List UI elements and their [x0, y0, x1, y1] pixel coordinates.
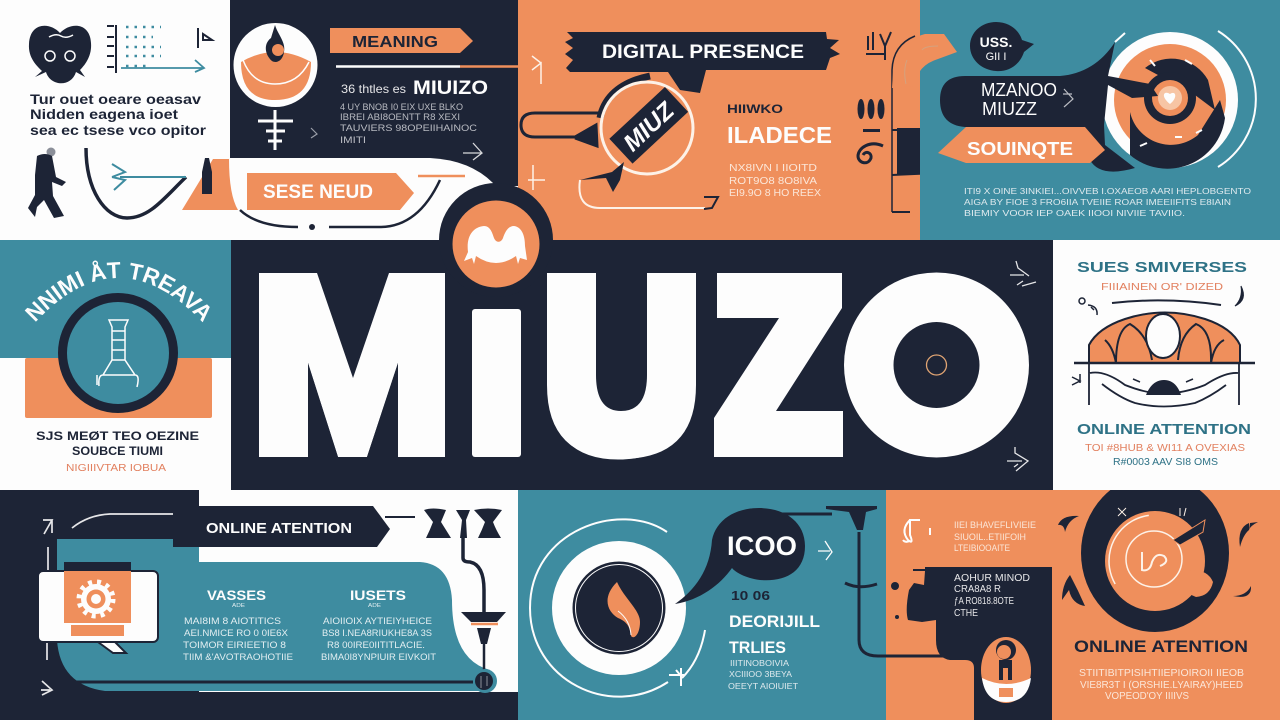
- text block: iusets: ADE: [368, 603, 382, 609]
- icon: white key mark: [903, 520, 930, 542]
- text block: deorijill: XCIIIOO 3BEYA: [729, 669, 792, 679]
- banner: meaning: [330, 28, 473, 53]
- text block: iusets: R8 00IRE0IITITLACIE.: [327, 640, 425, 650]
- text block: small upper: SIUOIL..ETIIFOIH: [954, 532, 1026, 542]
- icon: person in circle: [981, 637, 1031, 703]
- panel: bottom left online attention: [0, 490, 519, 720]
- text block: online attention right: R#0003 AAV SI8 OMS: [1113, 457, 1218, 468]
- text block: vasses: AEI.NMICE RO 0 0IE6X: [184, 628, 288, 638]
- connector over orange: [886, 654, 992, 658]
- text block: about miuizo: IMITI: [340, 135, 366, 145]
- shape: navy note block: CRA8A8 R: [954, 584, 1001, 595]
- bubble: uss: GII I: [986, 51, 1006, 63]
- text block: iladece: [727, 102, 832, 199]
- icon: orange pipe end: [892, 34, 957, 88]
- text block: teal paragraph: ITI9 X OINE 3INKIEI...OIVVEB I.OXAEOB AARI HEPLOBGENTO: [964, 186, 1251, 196]
- text block: left caption: SOUBCE TIUMI: [72, 446, 163, 458]
- text block: iladece: ILADECE: [727, 122, 832, 148]
- text block: online atention: VIE8R3T I (ORSHIE.LYAIRAY)HEED: [1080, 680, 1243, 691]
- icon: monitor gear: [38, 562, 158, 653]
- arrow: meaning: [463, 143, 482, 160]
- text block: online attention right: [1077, 421, 1251, 468]
- text block: intro: Nidden eagena ioet: [30, 107, 179, 122]
- text block: intro: Tur ouet oeare oeasav: [30, 92, 202, 107]
- shape: megaphone body: MIUZZ: [982, 99, 1037, 119]
- text block: online atention: ONLINE ATENTION: [1074, 637, 1248, 656]
- decor: bottom left marks: [41, 514, 173, 695]
- curved heading: NNIMI ÅT TREAVA: [24, 260, 210, 322]
- text block: intro: [30, 92, 207, 138]
- panel: top left white icons: [0, 0, 230, 240]
- banner: digital presence: DIGITAL PRESENCE: [602, 41, 804, 63]
- heading: sues smiverses: SUES SMIVERSES: [1077, 260, 1247, 276]
- text block: small upper: IIEI BHAVEFLIVIEIE: [954, 520, 1036, 530]
- panel: sese neud: [182, 158, 465, 230]
- text block: teal paragraph: [964, 186, 1251, 218]
- banner: digital presence: [565, 32, 840, 93]
- panel: main title navy: [231, 240, 1053, 490]
- icon: walking person: [28, 148, 66, 218]
- text block: vasses: MAI8IM 8 AIOTITICS: [184, 616, 281, 626]
- text block: online atention: VOPEOD'OY IIIIVS: [1105, 691, 1189, 702]
- panel: left arch teal: [0, 240, 231, 474]
- text block: deorijill: OEEYT AIOIUIET: [728, 681, 798, 691]
- icon: big dark ring: [1081, 490, 1229, 632]
- banner: souinqte: SOUINQTE: [967, 139, 1073, 159]
- shape: navy note block: AOHUR MINOD: [954, 573, 1030, 584]
- panel: bottom right orange: [886, 474, 1280, 720]
- text block: left caption: SJS MEØT TEO OEZINE: [36, 431, 199, 443]
- text block: deorijill: TRLIES: [729, 638, 786, 657]
- text block: small upper: LTEIBIOOAITE: [954, 543, 1010, 553]
- title: MiUZO: U: [535, 219, 705, 513]
- shape: orange trapezoid with bottle: [182, 158, 238, 210]
- title: MiUZO: [259, 272, 1029, 460]
- text block: deorijill: 10 06: [731, 588, 770, 603]
- icons: navy crescents: [1058, 516, 1258, 606]
- text block: deorijill: IIITINOBOIVIA: [730, 658, 789, 668]
- icons: left margin marks: [528, 56, 545, 190]
- chart: dot grid with arrow: [107, 25, 212, 73]
- title: MiUZO: O: [843, 234, 1030, 502]
- shape: teal card: [57, 539, 490, 691]
- title: MiUZO: M: [245, 216, 459, 514]
- banner: online attention: ONLINE ATENTION: [206, 521, 352, 537]
- text block: deorijill: DEORIJILL: [729, 612, 820, 631]
- text block: vasses: TOIMOR EIRIEETIO 8: [183, 640, 286, 650]
- shape: navy note block: CTHE: [954, 608, 978, 619]
- text block: iladece: HIIWKO: [727, 102, 783, 116]
- icon: face head: [29, 26, 91, 83]
- shape: megaphone body: MZANOO: [981, 80, 1057, 100]
- icon: magnifier tag: MIUZ: [618, 96, 681, 157]
- text block: online attention right: ONLINE ATTENTION: [1077, 421, 1251, 438]
- bubble: icoo: ICOO: [727, 531, 797, 561]
- text block: about miuizo: MIUIZO: [413, 78, 488, 99]
- banner: online attention: [173, 506, 390, 547]
- icon: pipe with figures: [424, 508, 506, 693]
- icon: target rings: [1102, 32, 1238, 169]
- arrow: small: [818, 541, 832, 560]
- text block: teal paragraph: AIGA BY FIOE 3 FRO6IIA TVEIIE ROAR IMEEIIFITS E8IAIN: [964, 197, 1231, 207]
- connector: vertical line and block: [892, 36, 938, 212]
- panel: bottom teal icoo: [518, 490, 992, 720]
- heading: sues smiverses: FIIIAINEN OR' DIZED: [1101, 282, 1223, 293]
- text block: about miuizo: [340, 78, 488, 145]
- text block: left caption: NIGIIIVTAR IOBUA: [66, 462, 166, 474]
- heading: sues smiverses: [1077, 260, 1247, 293]
- icon: center badge orange: [438, 183, 554, 297]
- text block: iladece: EI9.9O 8 HO REEX: [729, 188, 821, 199]
- icon: outer arcs: [1115, 31, 1256, 167]
- text block: vasses: TIIM &'AVOTRAOHOTIIE: [183, 652, 293, 662]
- text block: about miuizo: IBREI ABI8OENTT R8 XEXI: [340, 112, 460, 122]
- bubble: uss: USS.: [980, 34, 1012, 50]
- text block: online atention: [1074, 637, 1248, 702]
- title: MiUZO: i: [462, 231, 531, 510]
- connector: funnel pipe: [780, 506, 992, 656]
- text block: left caption: [36, 431, 199, 474]
- text block: online atention: STIITIBITPISIHTIIEPIOIROII IIEOB: [1079, 668, 1244, 679]
- text block: vasses: ADE: [232, 603, 246, 609]
- shape: megaphone body: [940, 42, 1158, 172]
- banner: sese neud: [247, 173, 414, 210]
- text block: iladece: ROT9O8 8O8IVA: [729, 176, 817, 187]
- text block: teal paragraph: BIEMIY VOOR IEP OAEK IIOOI NIVIIE TAVIIO.: [964, 208, 1185, 218]
- text block: small upper: [954, 520, 1036, 553]
- icon: magnifier tag: [521, 76, 718, 209]
- bubble: icoo: [675, 508, 805, 604]
- text block: iusets: AIOIIOIX AYTIEIYHEICE: [323, 616, 432, 626]
- text block: intro: sea ec tsese vco opitor: [30, 123, 207, 138]
- icon: tower in circle: [62, 298, 174, 408]
- bottom bracket curve: [240, 176, 465, 230]
- arrow: bottom right mark: [1007, 447, 1028, 471]
- icon: small chevron: [311, 128, 317, 138]
- title: MiUZO: Z: [708, 216, 847, 514]
- text block: deorijill: [728, 588, 820, 691]
- text block: about miuizo: 4 UY BNOB I0 EIX UXE BLKO: [340, 102, 463, 112]
- text block: iladece: NX8IVN I IIOITD: [729, 163, 817, 174]
- icon: dome with egg: [1072, 286, 1255, 406]
- text block: vasses: VASSES: [207, 587, 266, 603]
- panel: megaphone teal: [892, 0, 1280, 240]
- text block: vasses: [183, 587, 293, 662]
- panel: meaning dark background: [228, 0, 520, 242]
- icon: outer arcs: [530, 519, 705, 697]
- text block: iusets: [321, 587, 437, 662]
- panel: digital presence: [518, 0, 938, 240]
- curve with teal arrow: [86, 148, 186, 218]
- icons: right column symbols: [858, 32, 891, 163]
- text block: about miuizo: 36 thtles es: [341, 82, 406, 96]
- banner: sese neud: SESE NEUD: [263, 182, 373, 203]
- text block: iusets: IUSETS: [350, 587, 406, 603]
- panel: right dome white: [1053, 240, 1280, 490]
- text block: about miuizo: TAUVIERS 98OPEIIHAINOC: [340, 123, 478, 133]
- text block: online attention right: TOI #8HUB & WI11 A OVEXIAS: [1085, 443, 1245, 454]
- bubble: uss: [970, 22, 1034, 71]
- shape: navy note block: [891, 567, 1052, 720]
- arrow: top right mark: [1010, 261, 1036, 286]
- banner: souinqte: [938, 127, 1105, 163]
- text block: iusets: BIMA0I8YNPIUIR EIVKOIT: [321, 652, 437, 662]
- icon: concentric swirl disc: [552, 541, 686, 675]
- icon: bowl in circle: [234, 23, 318, 150]
- text block: iusets: BS8 I.NEA8RIUKHE8A 3S: [322, 628, 432, 638]
- banner: meaning: MEANING: [352, 34, 438, 51]
- shape: navy note block: ƒA RO818.8OTE: [954, 596, 1014, 607]
